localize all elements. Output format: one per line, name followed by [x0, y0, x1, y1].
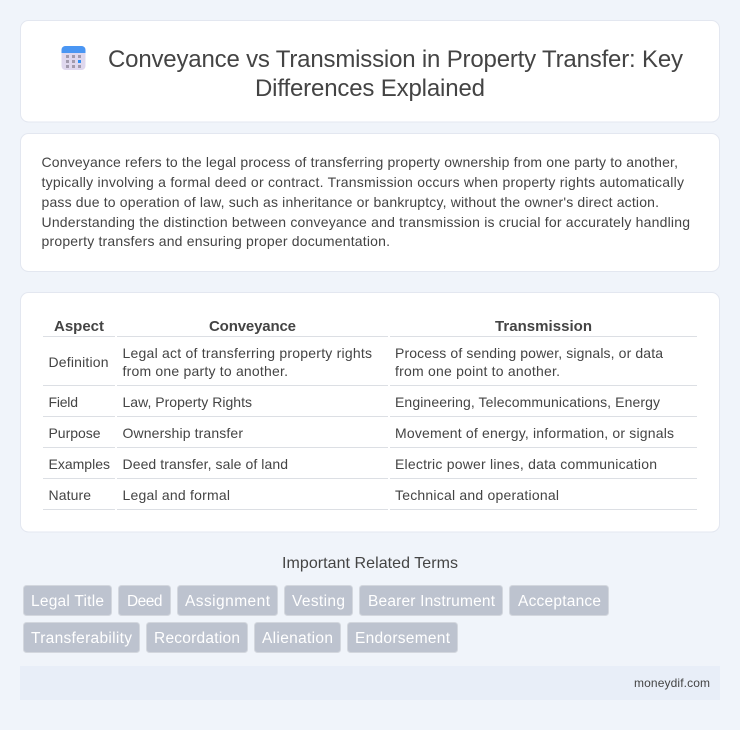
row: field: Field	[48, 394, 78, 410]
text block: introduction	[42, 154, 690, 249]
text block: introduction: Conveyance refers to the legal process of transferring property ownership from one party to another,	[42, 154, 678, 170]
row: definition: from one point to another.	[395, 363, 560, 379]
tag: acceptance: Acceptance	[518, 593, 601, 610]
row: definition: Process of sending power, signals, or data	[395, 345, 663, 361]
row: definition: Legal act of transferring property rights	[122, 345, 372, 361]
tag: assignment	[178, 586, 278, 616]
table header	[54, 318, 592, 335]
text block: introduction: property transfers and ensuring proper documentation.	[42, 233, 390, 249]
title: Conveyance vs Transmission in Property Transfer: Key	[108, 46, 683, 73]
row: purpose: Ownership transfer	[122, 425, 243, 441]
row: nature: Legal and formal	[122, 487, 230, 503]
footer source text: moneydif.com	[634, 676, 710, 690]
row: purpose: Movement of energy, information, or signals	[395, 425, 674, 441]
tag: bearer instrument: Bearer Instrument	[368, 593, 496, 610]
row: field: Engineering, Telecommunications, Energy	[395, 394, 660, 410]
row: examples: Deed transfer, sale of land	[122, 456, 288, 472]
row: definition	[48, 345, 663, 379]
icon: calendar	[62, 46, 86, 70]
text block: introduction: Understanding the distinction between conveyance and transmission is crucial for accurately handling	[42, 214, 690, 230]
tag: deed	[118, 586, 170, 616]
tag: vesting	[284, 586, 352, 616]
title	[108, 46, 683, 102]
row: purpose	[48, 425, 674, 441]
tag: endorsement	[348, 622, 458, 652]
row: definition: Definition	[48, 354, 108, 370]
table header: Conveyance	[209, 318, 296, 335]
tag: recordation	[146, 622, 248, 652]
heading: important related terms: Important Related Terms	[282, 555, 458, 572]
table header: Transmission	[495, 318, 592, 335]
row: nature: Technical and operational	[395, 487, 559, 503]
tags: related terms	[24, 586, 608, 652]
row: examples: Electric power lines, data communication	[395, 456, 657, 472]
tag: transferability: Transferability	[31, 630, 132, 647]
text block: introduction: pass due to operation of law, such as inheritance or bankruptcy, without the owner's direct action.	[42, 194, 659, 210]
panel: header	[20, 20, 720, 122]
tag: legal title: Legal Title	[31, 593, 104, 610]
tag: recordation: Recordation	[154, 630, 240, 647]
tag: endorsement: Endorsement	[355, 630, 451, 647]
row: nature	[48, 487, 559, 503]
tag: bearer instrument	[360, 586, 502, 616]
row: field	[48, 394, 660, 410]
footer	[20, 666, 720, 700]
row: nature: Nature	[48, 487, 91, 503]
table header: Aspect	[54, 318, 104, 335]
tag: legal title	[24, 586, 112, 616]
tag: alienation: Alienation	[262, 630, 333, 647]
tag: transferability	[24, 622, 140, 652]
tag: assignment: Assignment	[185, 593, 271, 610]
text block: introduction: typically involving a formal deed or contract. Transmission occurs when property rights automatically	[42, 174, 684, 190]
title: Differences Explained	[255, 75, 485, 102]
panel: comparison table	[20, 292, 720, 532]
tag: acceptance	[510, 586, 608, 616]
panel: introduction	[20, 134, 720, 272]
tag: alienation	[254, 622, 340, 652]
tag: deed: Deed	[127, 593, 162, 610]
row: examples	[48, 456, 657, 472]
tag: vesting: Vesting	[292, 593, 345, 610]
row: examples: Examples	[48, 456, 110, 472]
row: field: Law, Property Rights	[122, 394, 252, 410]
row: definition: from one party to another.	[122, 363, 288, 379]
row: purpose: Purpose	[48, 425, 101, 441]
